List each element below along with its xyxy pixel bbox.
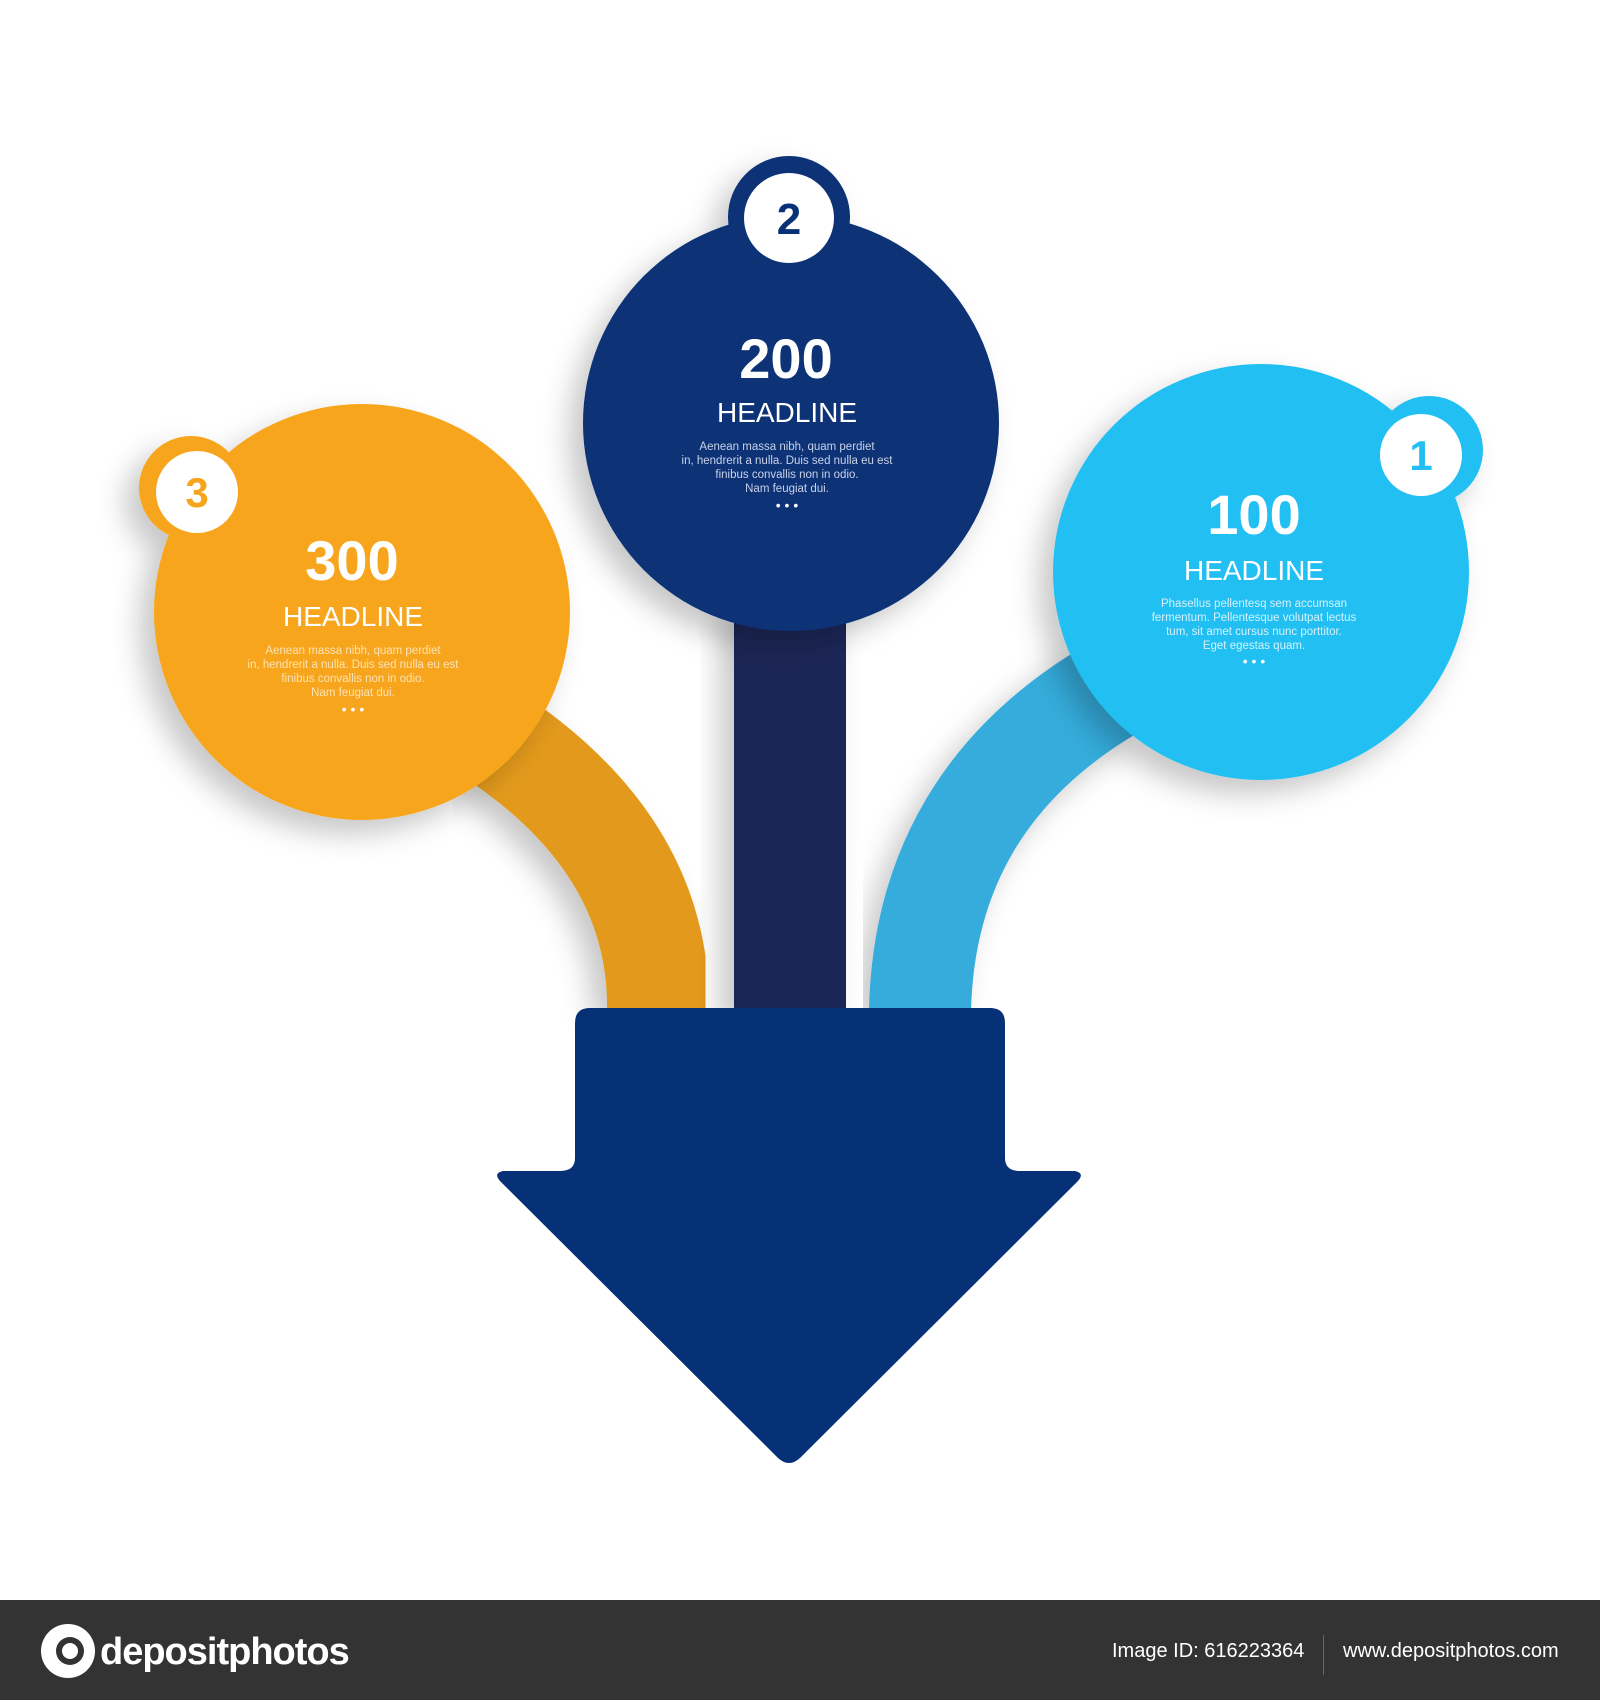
text block: 200: HEADLINE xyxy=(717,397,857,428)
arc: orange connector xyxy=(500,740,658,1010)
text block: 100: fermentum. Pellentesque volutpat lectus xyxy=(1152,612,1357,624)
text block: 100: HEADLINE xyxy=(1184,555,1324,586)
text block: 300: Aenean massa nibh, quam perdiet xyxy=(265,645,441,657)
text block: 100 xyxy=(1152,483,1357,669)
stem: navy connector xyxy=(734,600,846,1010)
logo text: depositphotos xyxy=(100,1631,349,1673)
panel: step 2 navy xyxy=(583,156,999,631)
text block: 100: tum, sit amet cursus nunc porttitor. xyxy=(1166,626,1342,638)
badge: 2: 2 xyxy=(777,195,801,244)
badge: 3 xyxy=(156,451,238,533)
text block: 200: • • • xyxy=(776,497,798,513)
text block: 300: 300 xyxy=(305,529,399,592)
text block: 100: Eget egestas quam. xyxy=(1203,640,1305,652)
icon: camera logo xyxy=(41,1624,95,1678)
text block: 100: Phasellus pellentesq sem accumsan xyxy=(1161,598,1347,610)
text block: 300 xyxy=(248,529,459,717)
arrow: down xyxy=(497,1008,1081,1463)
text block: 300: • • • xyxy=(342,701,364,717)
text block: 200: finibus convallis non in odio. xyxy=(715,469,859,481)
panel: step 1 cyan xyxy=(1053,364,1483,780)
badge: 2 xyxy=(744,173,834,263)
text block: 100: 100 xyxy=(1207,483,1301,546)
panel: step 3 orange xyxy=(139,404,570,820)
text block: 300: HEADLINE xyxy=(283,601,423,632)
image id: Image ID: 616223364 xyxy=(1112,1640,1304,1662)
website: www.depositphotos.com xyxy=(1342,1640,1559,1662)
badge: 3: 3 xyxy=(185,469,209,516)
text block: 300: finibus convallis non in odio. xyxy=(281,673,425,685)
badge: 1: 1 xyxy=(1409,432,1433,479)
footer bar xyxy=(0,1600,1600,1700)
text block: 200: 200 xyxy=(739,327,833,390)
text block: 300: Nam feugiat dui. xyxy=(311,687,395,699)
text block: 200: in, hendrerit a nulla. Duis sed nulla eu est xyxy=(682,455,893,467)
text block: 200 xyxy=(682,327,893,513)
text block: 300: in, hendrerit a nulla. Duis sed nulla eu est xyxy=(248,659,459,671)
text block: 100: • • • xyxy=(1243,653,1265,669)
text block: 200: Aenean massa nibh, quam perdiet xyxy=(699,441,875,453)
arc: cyan connector xyxy=(920,690,1110,1010)
badge: 1 xyxy=(1380,414,1462,496)
text block: 200: Nam feugiat dui. xyxy=(745,483,829,495)
